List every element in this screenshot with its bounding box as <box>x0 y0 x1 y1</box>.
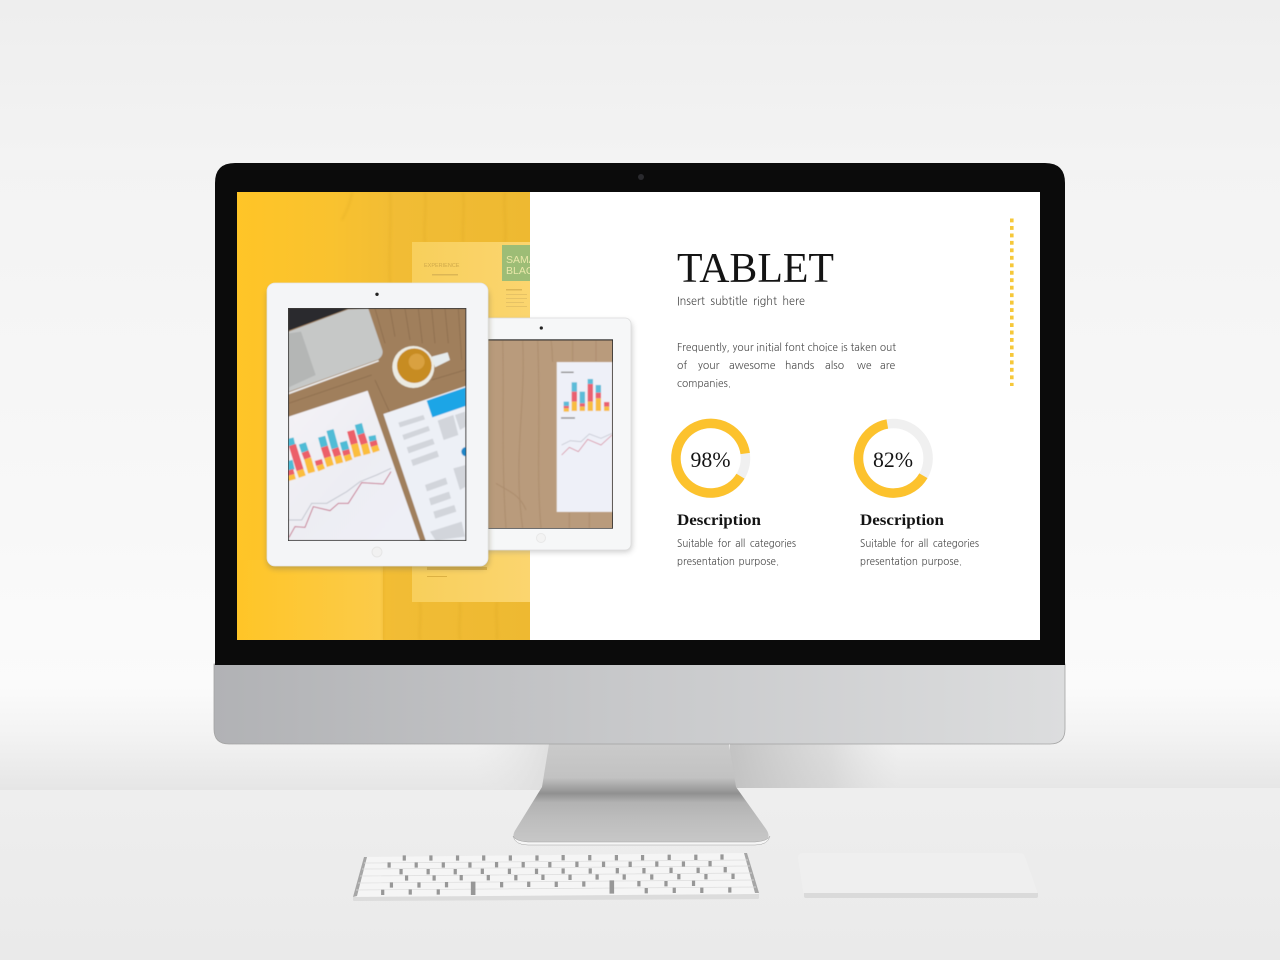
body paragraph: companies. <box>677 378 731 389</box>
chart paper <box>289 391 420 540</box>
body paragraph: also <box>825 360 844 371</box>
camera <box>540 326 543 330</box>
green title block: SAMA <box>506 254 536 266</box>
home button <box>372 547 382 557</box>
row lines <box>356 860 756 890</box>
description two <box>860 512 979 567</box>
laptop <box>289 309 383 394</box>
title: TABLET <box>677 246 834 292</box>
report bars <box>564 379 609 412</box>
tablet: landscape, behind <box>470 318 632 552</box>
keyboard <box>353 853 759 901</box>
body paragraph: your <box>698 360 720 371</box>
monitor stand <box>513 744 770 845</box>
description one: presentation purpose. <box>677 556 779 567</box>
green title block: BLACK <box>506 265 540 277</box>
description two: Suitable for all categories <box>860 538 979 549</box>
body paragraph: of <box>677 360 687 371</box>
screen photo: desk with laptop, coffee and charts <box>288 308 471 541</box>
description one <box>677 512 796 567</box>
monitor bezel <box>215 163 1065 665</box>
subtitle: Insert subtitle right here <box>677 295 805 307</box>
body paragraph: Frequently, your initial font choice is taken out <box>677 342 896 353</box>
tablet: portrait, front <box>267 283 489 569</box>
webcam <box>638 174 644 180</box>
monitor chin <box>214 664 1065 744</box>
donut chart: 82% <box>858 424 928 493</box>
coffee cup <box>392 346 450 388</box>
key gaps <box>383 854 733 895</box>
description one: Description <box>677 512 761 529</box>
donut chart: 98%: 98% <box>690 447 730 472</box>
body paragraph: we <box>857 360 872 371</box>
body paragraph: are <box>880 360 896 371</box>
blue header <box>427 387 466 417</box>
bar chart <box>289 424 376 480</box>
body paragraph: hands <box>785 360 815 371</box>
slide screen <box>237 192 1040 640</box>
report text blocks <box>398 412 466 540</box>
description one: Suitable for all categories <box>677 538 796 549</box>
camera <box>375 293 379 296</box>
report line chart <box>562 435 612 455</box>
report paper <box>383 386 466 540</box>
body paragraph: awesome <box>729 360 776 371</box>
dotted accent line <box>1010 218 1014 386</box>
body paragraph <box>677 342 896 389</box>
panel: yellow wood background <box>237 192 540 640</box>
line chart <box>289 472 391 537</box>
resume paper <box>412 242 530 602</box>
description two: presentation purpose. <box>860 556 962 567</box>
trackpad <box>798 853 1038 898</box>
green title block <box>502 245 530 281</box>
donut chart: 98% <box>676 423 746 493</box>
donut chart: 82%: 82% <box>873 447 913 472</box>
home button <box>536 534 546 542</box>
description two: Description <box>860 512 944 529</box>
resume paper: EXPERIENCE <box>424 263 460 269</box>
screen photo: wood and chart report <box>488 339 613 529</box>
